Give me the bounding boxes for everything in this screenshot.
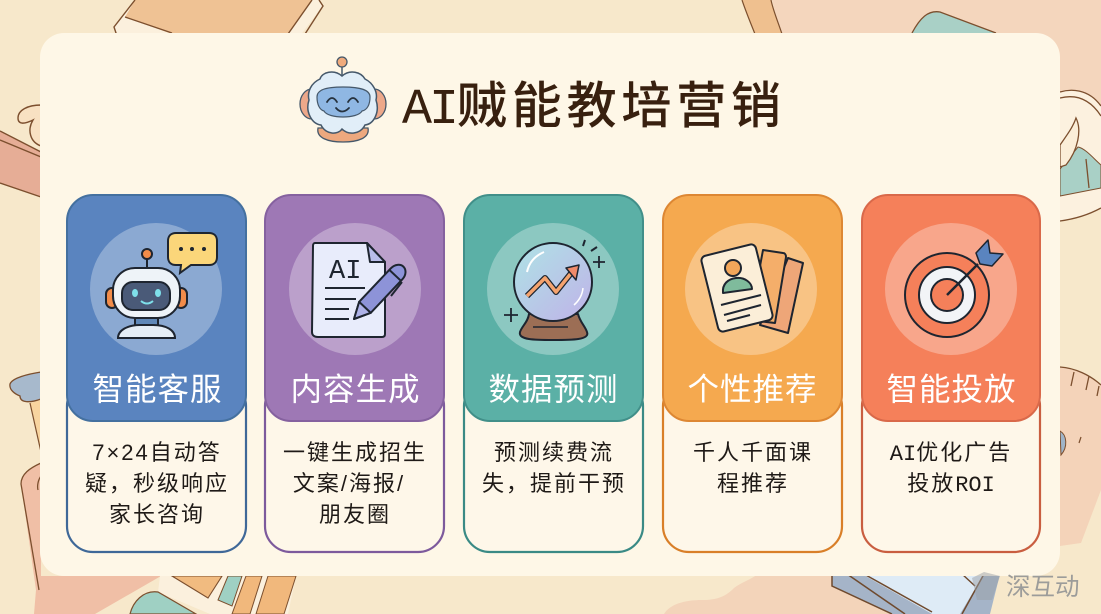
- description: 文案/海报/: [293, 471, 405, 496]
- heading: 智能客服: [92, 371, 223, 407]
- icon: AI document with pen: [312, 243, 409, 337]
- icon: robot with speech bubble: [106, 233, 217, 338]
- title: AI: [402, 82, 456, 139]
- description: 疑，秒级响应: [85, 471, 229, 496]
- description: 程推荐: [717, 471, 789, 496]
- description: 家长咨询: [109, 502, 205, 527]
- icon: AI document with pen: AI: [329, 257, 361, 287]
- watermark: 深互动: [1006, 573, 1080, 601]
- description: 朋友圈: [319, 502, 391, 527]
- heading: 数据预测: [488, 371, 619, 407]
- card: 智能客服: [67, 195, 246, 552]
- icon: smiling AI brain: [300, 57, 386, 142]
- description: 失，提前干预: [482, 471, 626, 496]
- title: 贼能教培营销: [457, 78, 786, 134]
- watermark: [972, 572, 1080, 601]
- card: 个性推荐: [663, 195, 842, 552]
- description: 一键生成招生: [283, 440, 427, 465]
- icon: crystal ball with rising chart: [504, 240, 605, 340]
- description: 预测续费流: [494, 440, 614, 465]
- description: 投放ROI: [907, 471, 995, 498]
- icon: profile cards: [700, 243, 803, 333]
- description: 7×24自动答: [92, 440, 222, 465]
- card: 内容生成: [265, 195, 444, 552]
- icon: target with arrow: [905, 240, 1003, 337]
- card: 智能投放: [862, 195, 1040, 552]
- description: AI优化广告: [890, 440, 1012, 467]
- description: 千人千面课: [693, 440, 813, 465]
- heading: 智能投放: [886, 371, 1017, 407]
- card: 数据预测: [464, 195, 643, 552]
- heading: 内容生成: [290, 371, 421, 407]
- heading: 个性推荐: [687, 371, 818, 407]
